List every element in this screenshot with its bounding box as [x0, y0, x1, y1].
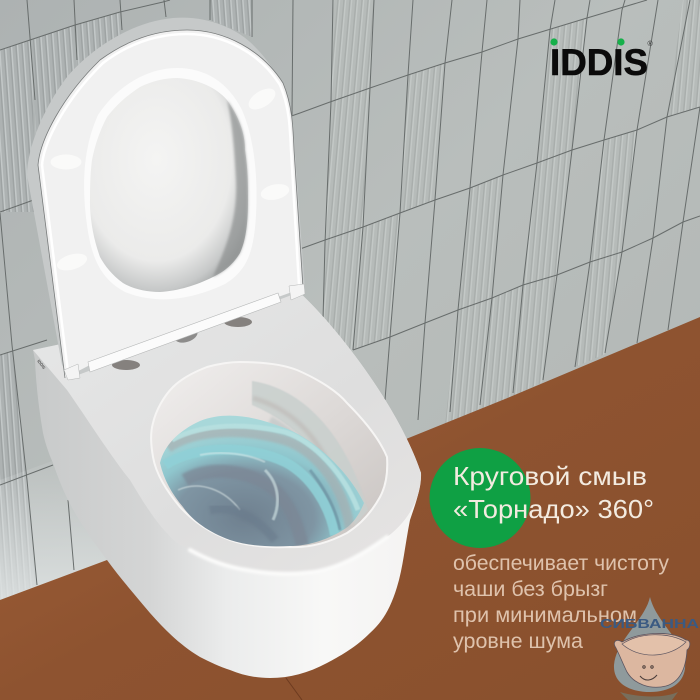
seat inner ridge: [84, 68, 257, 299]
logo dot one: [550, 38, 558, 46]
bowl top surface: [33, 293, 421, 574]
bowl body: [33, 293, 421, 678]
rim highlight: [190, 537, 387, 574]
bumper lower right: [259, 182, 291, 202]
hinge ends: [64, 284, 305, 380]
tub rim: [622, 635, 686, 655]
bumper lower left: [55, 251, 89, 273]
heading: «Торнадо» 360°: [453, 494, 654, 524]
floor: [0, 317, 700, 700]
hinge bar: [88, 293, 281, 372]
logo: [550, 38, 654, 83]
seat shell: [27, 18, 305, 378]
description: при минимальном: [453, 604, 637, 627]
logo dot two: [617, 38, 625, 46]
registered mark: ®: [648, 40, 654, 48]
logo wordmark: IDDIS: [550, 42, 648, 83]
chrome button: [172, 325, 200, 345]
bumper top left: [50, 154, 82, 170]
heading: Круговой смыв: [453, 461, 647, 491]
description: [453, 552, 669, 653]
bowl opening: [151, 362, 387, 547]
tub foot: [620, 692, 678, 700]
watermark mascot: [600, 597, 700, 700]
tub face: [640, 666, 657, 680]
rear bolt: [112, 360, 140, 370]
heading: [453, 461, 654, 524]
seat dark edge: [38, 30, 303, 378]
green circle: [430, 448, 530, 548]
seat front: [38, 30, 303, 378]
toilet bowl: [33, 293, 421, 678]
seat highlight edge: [42, 34, 299, 372]
front bolt: [224, 317, 252, 327]
floor seam: [286, 678, 302, 700]
bumper top right: [245, 84, 279, 114]
tub: [614, 633, 690, 687]
watermark text: СИБВАННА: [600, 616, 700, 631]
seat hole: [90, 78, 248, 292]
description: чаши без брызг: [453, 578, 608, 601]
water drop: [614, 597, 685, 692]
description: обеспечивает чистоту: [453, 552, 669, 575]
water swirl: [160, 416, 364, 546]
description: уровне шума: [453, 630, 583, 653]
seat hole shadow: [213, 100, 248, 277]
flush band: [252, 381, 368, 528]
raised seat: [27, 18, 305, 380]
small logo on bowl: IDDIS: [36, 359, 47, 370]
